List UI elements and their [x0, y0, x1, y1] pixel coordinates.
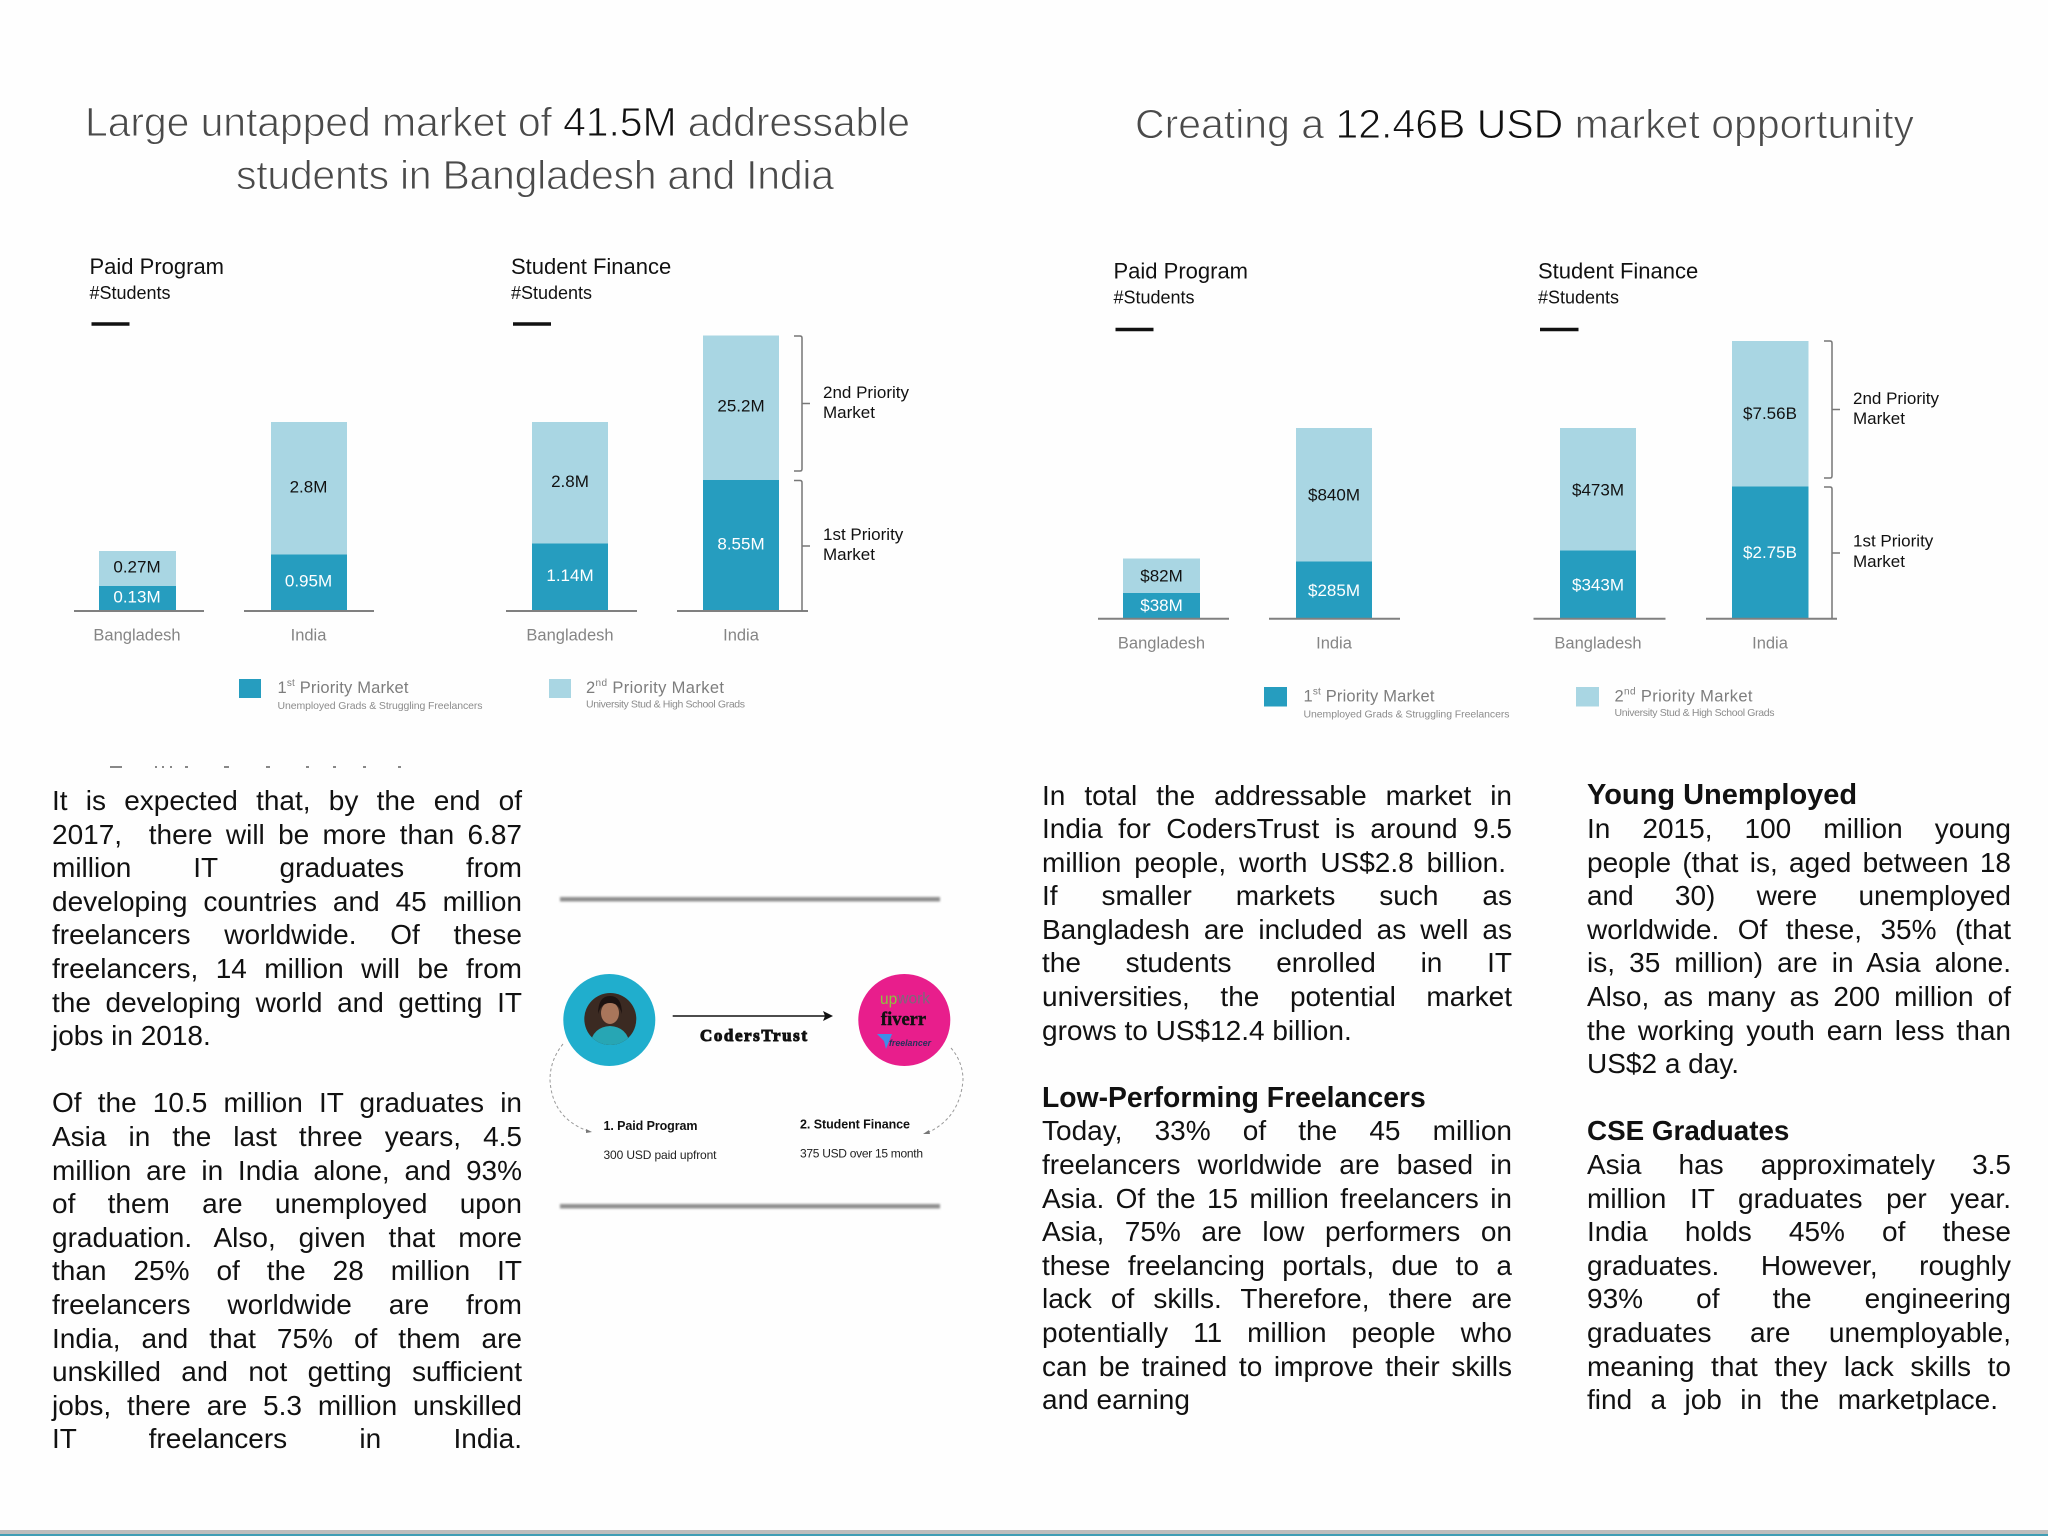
- bar chart: paid program Bangladesh value: $38M: [1140, 596, 1183, 615]
- legend: st: [287, 678, 295, 688]
- bar chart: paid program India: 0.95M: [285, 572, 332, 590]
- bar chart: student finance Bangladesh: Bangladesh: [526, 626, 614, 644]
- legend: value: Unemployed Grads & Struggling Freelancers: [1304, 708, 1510, 720]
- heading: student finance value: [1538, 258, 1698, 330]
- brackets: priority markets: Market: [823, 403, 875, 422]
- bar chart: paid program Bangladesh: 0.13M: [113, 588, 161, 606]
- text block: young unemployed and CSE graduates: Also, as many as 200 million of: [1587, 981, 2011, 1012]
- text block: young unemployed and CSE graduates: US$2 a day.: [1587, 1048, 1739, 1079]
- text block: young unemployed and CSE graduates: graduates are unemployable,: [1587, 1317, 2011, 1348]
- legend: value: st: [1313, 686, 1321, 697]
- icon: freelance marketplaces: upwork: [880, 990, 930, 1008]
- heading: student finance value: #Students: [1538, 288, 1619, 308]
- legend: value: Priority Market: [1636, 688, 1753, 706]
- panel: addressable students: [74, 99, 910, 712]
- text block: India market and low-performing freelancers: Asia, 75% are low performers on: [1042, 1216, 1512, 1247]
- label: student finance: 375 USD over 15 month: [800, 1146, 923, 1160]
- text block: India market and low-performing freelancers: India for CodersTrust is around 9.5: [1042, 813, 1512, 844]
- heading: student finance students: #Students: [511, 283, 592, 303]
- bar chart: student finance India: India: [723, 626, 760, 644]
- text block: young unemployed and CSE graduates: 93% of the engineering: [1587, 1283, 2011, 1314]
- text block: freelancers and graduates overview: jobs, there are 5.3 million unskilled: [52, 1390, 522, 1421]
- text block: India market and low-performing freelancers: these freelancing portals, due to a: [1042, 1250, 1512, 1281]
- legend: value: 1: [1304, 688, 1313, 706]
- brackets: priority markets: [794, 336, 909, 611]
- text block: freelancers and graduates overview: Of the 10.5 million IT graduates in: [52, 1087, 522, 1118]
- text block: India market and low-performing freelancers: the students enrolled in IT: [1042, 947, 1512, 978]
- text block: India market and low-performing freelancers: universities, the potential market: [1042, 981, 1512, 1012]
- bar chart: paid program Bangladesh value: [1098, 558, 1229, 652]
- bar chart: student finance Bangladesh: [506, 422, 637, 644]
- brackets: priority markets: 1st Priority: [823, 525, 904, 544]
- text block: India market and low-performing freelancers: Asia. Of the 15 million freelancers in: [1042, 1183, 1512, 1214]
- text block: young unemployed and CSE graduates: Asia has approximately 3.5: [1587, 1149, 2011, 1180]
- legend: Priority Market: [607, 679, 724, 697]
- text block: India market and low-performing freelancers: If smaller markets such as: [1042, 880, 1512, 911]
- label: student finance: 2. Student Finance: [800, 1118, 910, 1132]
- legend: value: 2: [1614, 688, 1624, 706]
- bar chart: paid program Bangladesh: Bangladesh: [93, 626, 181, 644]
- text block: freelancers and graduates overview: million IT graduates from: [52, 852, 522, 883]
- brackets: priority value markets: 1st Priority: [1853, 532, 1934, 550]
- icon: freelance marketplaces: freelancer: [889, 1038, 932, 1048]
- title: market opportunity: Creating a 12.46B USD market opportunity: [1135, 101, 1914, 147]
- text block: freelancers and graduates overview: unskilled and not getting sufficient: [52, 1356, 522, 1387]
- bar chart: paid program India value: India: [1316, 634, 1353, 652]
- icon: freelance marketplaces: [858, 974, 950, 1066]
- text block: young unemployed and CSE graduates: worldwide. Of these, 35% (that: [1587, 914, 2011, 945]
- text block: young unemployed and CSE graduates: million IT graduates per year.: [1587, 1183, 2011, 1214]
- text block: young unemployed and CSE graduates: [1587, 778, 2012, 1415]
- text block: India market and low-performing freelancers: million people, worth US$2.8 billion.: [1042, 847, 1506, 878]
- bar chart: paid program India value: $840M: [1308, 486, 1360, 504]
- icon: freelance marketplaces: fiverr: [881, 1010, 926, 1030]
- text block: young unemployed and CSE graduates: graduates. However, roughly: [1587, 1250, 2011, 1281]
- heading: paid program value: #Students: [1114, 288, 1195, 308]
- bar chart: paid program Bangladesh: [74, 551, 204, 644]
- text block: India market and low-performing freelancers: Today, 33% of the 45 million: [1042, 1115, 1512, 1146]
- heading: paid program students: Paid Program: [90, 254, 224, 279]
- text block: young unemployed and CSE graduates: India holds 45% of these: [1587, 1216, 2011, 1247]
- bar chart: student finance Bangladesh value: [1534, 428, 1666, 652]
- bar chart: student finance Bangladesh: 2.8M: [551, 472, 589, 491]
- bar chart: student finance India value: $2.75B: [1743, 543, 1797, 562]
- text block: freelancers and graduates overview: of them are unemployed upon: [52, 1188, 522, 1219]
- text block: India market and low-performing freelancers: can be trained to improve their skills: [1042, 1351, 1512, 1382]
- text block: young unemployed and CSE graduates: Young Unemployed: [1587, 778, 1857, 810]
- heading: student finance value: Student Finance: [1538, 258, 1698, 284]
- heading: paid program students: #Students: [90, 283, 171, 303]
- text block: India market and low-performing freelancers: Bangladesh are included as well as: [1042, 914, 1512, 945]
- text block: young unemployed and CSE graduates: find a job in the marketplace.: [1587, 1384, 1998, 1415]
- brackets: priority value markets: Market: [1853, 409, 1905, 428]
- bar chart: student finance India: 25.2M: [717, 396, 765, 416]
- text block: freelancers and graduates overview: 2017, there will be more than 6.87: [52, 819, 522, 850]
- bar chart: student finance Bangladesh value: $473M: [1572, 480, 1624, 500]
- arrow: dashed left: [550, 1044, 592, 1133]
- bar chart: paid program India value: [1269, 428, 1400, 652]
- icon: student photo: [563, 974, 655, 1066]
- cut-off text remnant: [110, 766, 401, 768]
- text block: young unemployed and CSE graduates: the working youth earn less than: [1587, 1015, 2011, 1046]
- text block: freelancers and graduates overview: It is expected that, by the end of: [52, 785, 522, 816]
- bar chart: student finance Bangladesh: 1.14M: [546, 566, 594, 585]
- text block: India market and low-performing freelancers: In total the addressable market in: [1042, 780, 1512, 810]
- bar chart: paid program Bangladesh value: Bangladesh: [1118, 634, 1205, 652]
- bar chart: paid program India: India: [291, 626, 327, 644]
- bar chart: student finance India: [677, 336, 808, 644]
- bar chart: student finance India value: [1706, 341, 1837, 652]
- bar chart: student finance India value: $7.56B: [1743, 404, 1797, 423]
- text block: freelancers and graduates overview: India, and that 75% of them are: [52, 1322, 522, 1354]
- bar chart: paid program Bangladesh value: $82M: [1140, 566, 1183, 586]
- text block: freelancers and graduates overview: the developing world and getting IT: [52, 987, 522, 1018]
- text block: freelancers and graduates overview: developing countries and 45 million: [52, 886, 522, 917]
- heading: paid program value: Paid Program: [1114, 258, 1248, 284]
- bar chart: paid program India: 2.8M: [290, 478, 327, 496]
- bar chart: student finance India: 8.55M: [717, 534, 765, 554]
- text block: India market and low-performing freelancers: grows to US$12.4 billion.: [1042, 1015, 1352, 1046]
- text block: young unemployed and CSE graduates: people (that is, aged between 18: [1587, 847, 2011, 878]
- bar chart: paid program India: [244, 422, 374, 644]
- text block: India market and low-performing freelancers: freelancers worldwide are based in: [1042, 1149, 1512, 1180]
- text block: freelancers and graduates overview: freelancers worldwide are from: [52, 1289, 522, 1320]
- legend: 2: [586, 679, 595, 697]
- text block: India market and low-performing freelancers: [1042, 780, 1512, 1415]
- panel: market opportunity: [1098, 101, 1939, 720]
- text block: freelancers and graduates overview: graduation. Also, given that more: [52, 1222, 522, 1253]
- legend: 1: [278, 679, 287, 697]
- heading: student finance students: Student Finance: [511, 254, 671, 279]
- legend: value: nd: [1624, 686, 1636, 697]
- text block: young unemployed and CSE graduates: meaning that they lack skills to: [1587, 1351, 2011, 1382]
- text block: freelancers and graduates overview: than 25% of the 28 million IT: [52, 1255, 522, 1286]
- heading: paid program value: [1114, 258, 1248, 330]
- text block: young unemployed and CSE graduates: In 2015, 100 million young: [1587, 813, 2011, 844]
- legend: University Stud & High School Grads: [586, 698, 745, 710]
- bar chart: student finance Bangladesh value: Bangladesh: [1554, 634, 1642, 652]
- text block: freelancers and graduates overview: [51, 785, 522, 1454]
- legend: value: [1264, 686, 1774, 720]
- label: CodersTrust: CodersTrust: [700, 1026, 807, 1045]
- bottom band: [0, 1530, 2048, 1536]
- brackets: priority value markets: [1824, 341, 1939, 619]
- bar chart: paid program Bangladesh: 0.27M: [113, 558, 161, 576]
- text block: India market and low-performing freelancers: and earning: [1042, 1384, 1190, 1415]
- bar chart: paid program India value: $285M: [1308, 581, 1360, 600]
- text block: young unemployed and CSE graduates: is, 35 million) are in Asia alone.: [1587, 947, 2011, 978]
- arrow: dashed right: [923, 1048, 963, 1134]
- title: addressable market: [85, 99, 910, 198]
- bar chart: student finance India value: India: [1752, 634, 1789, 652]
- text block: freelancers and graduates overview: Asia in the last three years, 4.5: [52, 1121, 522, 1152]
- legend: Unemployed Grads & Struggling Freelancers: [278, 700, 482, 712]
- text block: freelancers and graduates overview: freelancers, 14 million will be from: [52, 953, 522, 984]
- title: addressable market: students in Bangladesh and India: [236, 152, 834, 198]
- legend: value: Priority Market: [1321, 688, 1435, 706]
- brackets: priority markets: 2nd Priority: [823, 383, 909, 402]
- text block: freelancers and graduates overview: million are in India alone, and 93%: [52, 1155, 522, 1186]
- diagram: business model: [550, 897, 963, 1208]
- legend: Priority Market: [295, 679, 409, 697]
- text block: freelancers and graduates overview: IT freelancers in India.: [52, 1423, 522, 1454]
- brackets: priority markets: Market: [823, 545, 875, 564]
- bar chart: student finance Bangladesh value: $343M: [1572, 576, 1624, 594]
- label: student finance: [800, 1118, 923, 1160]
- heading: paid program students: [90, 254, 224, 324]
- text block: freelancers and graduates overview: jobs in 2018.: [52, 1020, 211, 1051]
- brackets: priority value markets: 2nd Priority: [1853, 389, 1939, 408]
- text block: young unemployed and CSE graduates: and 30) were unemployed: [1587, 880, 2011, 911]
- text block: India market and low-performing freelancers: lack of skills. Therefore, there are: [1042, 1283, 1512, 1314]
- text block: freelancers and graduates overview: freelancers worldwide. Of these: [52, 919, 522, 950]
- title: addressable market: Large untapped market of 41.5M addressable: [85, 99, 910, 145]
- label: paid program: [604, 1119, 717, 1162]
- label: paid program: 300 USD paid upfront: [604, 1148, 717, 1162]
- label: paid program: 1. Paid Program: [604, 1119, 698, 1133]
- text block: India market and low-performing freelancers: Low-Performing Freelancers: [1042, 1081, 1426, 1113]
- heading: student finance students: [511, 254, 671, 324]
- brackets: priority value markets: Market: [1853, 552, 1905, 571]
- text block: young unemployed and CSE graduates: CSE Graduates: [1587, 1115, 1789, 1146]
- text block: India market and low-performing freelancers: potentially 11 million people who: [1042, 1317, 1512, 1348]
- legend: [239, 678, 745, 712]
- legend: nd: [596, 678, 607, 688]
- arrow: to marketplaces: [673, 1011, 833, 1021]
- legend: value: University Stud & High School Grads: [1614, 707, 1774, 719]
